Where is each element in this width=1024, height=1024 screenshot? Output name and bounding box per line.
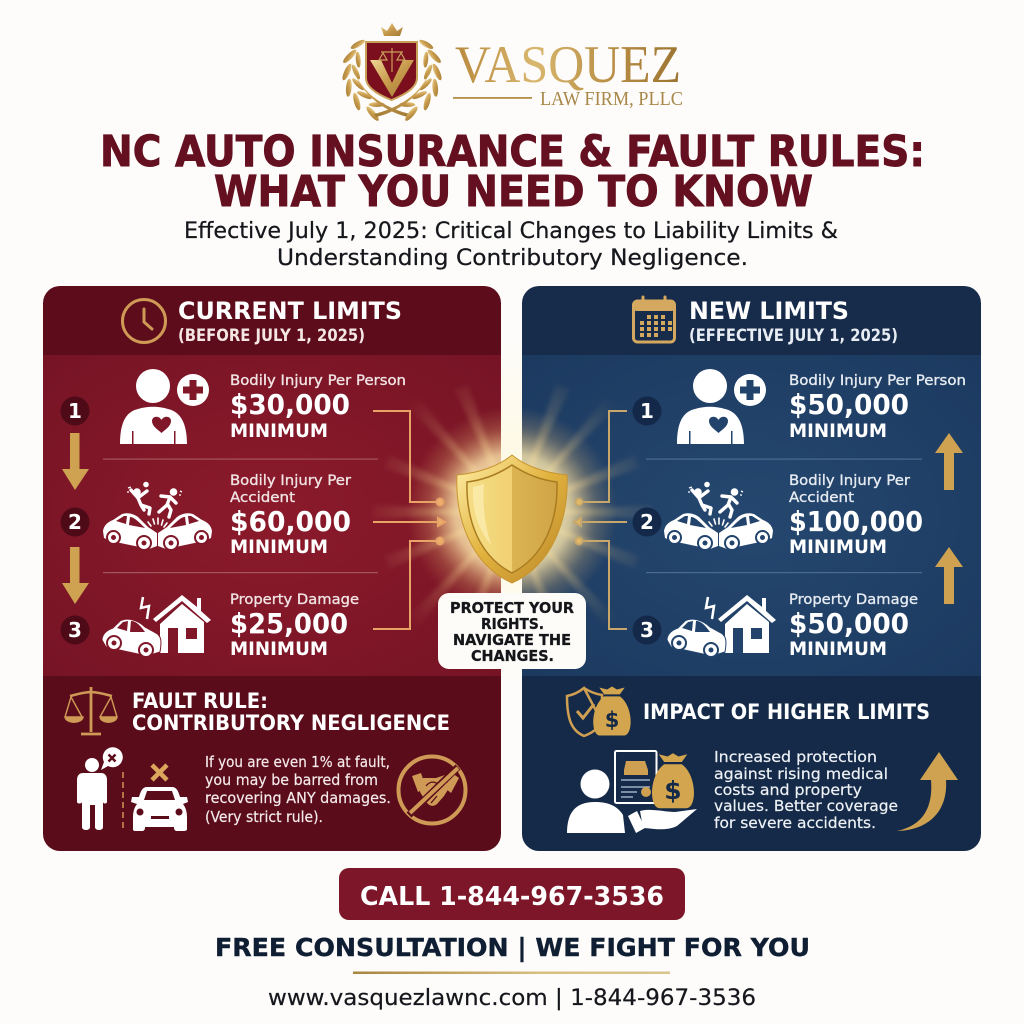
badge 2: 2 [640,510,654,534]
arrow: up 2 [935,547,963,604]
callout: protect your rights: RIGHTS. [481,615,544,633]
badge 1 [60,396,90,426]
title: NC AUTO INSURANCE & FAULT RULES: [100,127,925,177]
badge 3 [60,616,90,644]
wordmark: VASQUEZ [455,36,681,94]
icon: shield check with money bag [567,687,631,736]
row 3 text: $50,000 [789,607,909,640]
row 2 text: MINIMUM [230,536,328,558]
arrow: up 1 [935,433,963,490]
row 2 text: Bodily Injury Per [230,473,351,489]
impact text: against rising medical [714,765,888,783]
heading: impact: IMPACT OF HIGHER LIMITS [643,700,930,724]
row 2 text: $100,000 [789,505,923,538]
icon: golden shield [457,455,567,583]
callout: protect your rights [438,593,586,669]
badge 1: 1 [68,399,82,423]
center glow and rays [372,384,652,641]
icon: prohibited handshake [398,756,466,824]
footer: impact of higher limits [567,687,958,833]
subtitle: Understanding Contributory Negligence. [277,245,748,271]
subheading: effective date: (EFFECTIVE JULY 1, 2025) [689,326,898,345]
subheading: before date: (BEFORE JULY 1, 2025) [178,326,365,345]
title [100,127,925,217]
badge 3: 3 [68,618,82,642]
icon: crown [381,23,403,36]
icon: car front view [131,787,188,831]
badge 2 [60,508,90,536]
heading: current limits: CURRENT LIMITS [178,297,402,325]
call button [339,868,685,920]
row 1 text: Bodily Injury Per Person [789,373,966,389]
arrow: curved up [897,752,958,831]
impact text [714,748,898,832]
icon: person with medical cross [120,369,209,444]
row 2 text: MINIMUM [789,536,887,558]
row 2 text: $60,000 [230,505,351,538]
impact text: costs and property [714,781,862,799]
right panel header [634,297,898,345]
callout: protect your rights: NAVIGATE THE [453,631,571,649]
callout: protect your rights: PROTECT YOUR [450,599,574,617]
left column rows [60,369,406,660]
tagline: LAW FIRM, PLLC [540,88,683,110]
website and phone: www.vasquezlawnc.com | 1-844-967-3536 [268,986,756,1011]
icon: person, policy and money [567,751,697,833]
left connectors [373,411,445,629]
icon: car crash [103,482,212,550]
badge 3: 3 [640,618,654,642]
logo: Vasquez Law Firm [341,23,683,122]
fault rule text: you may be barred from [205,771,378,789]
icon: scales of justice [65,687,117,734]
row 3 text [230,592,359,660]
left panel header [122,297,402,345]
icon: car hitting house [667,595,776,657]
impact text: values. Better coverage [714,797,898,815]
row 2 text [230,473,351,558]
row 2 text: Accident [230,490,295,506]
icon: laurel wreath [341,38,443,122]
icon: car hitting house [102,595,211,657]
subtitle [184,218,838,271]
impact text: Increased protection [714,748,877,766]
badge 2: 2 [68,510,82,534]
badge 1 [632,396,662,426]
row 1 text: $50,000 [789,388,909,421]
panel: new limits [522,286,981,851]
icon: car crash [664,482,773,550]
row 1 text: $30,000 [230,388,350,421]
row 3 text: $25,000 [230,607,348,640]
badge 2 [632,508,662,536]
icon: clock [122,300,166,342]
subtitle: Effective July 1, 2025: Critical Changes to Liability Limits & [184,218,838,244]
icon: person with x speech bubble [77,747,123,830]
fault rule text: If you are even 1% at fault, [205,753,390,771]
row 1 text: Bodily Injury Per Person [230,373,406,389]
row 1 text [789,373,966,442]
row 3 text: Property Damage [230,592,359,608]
tagline: free consultation: FREE CONSULTATION | WE FIGHT FOR YOU [215,933,810,962]
icon: calendar [634,297,674,342]
icon: crest shield [366,42,417,100]
row 2 text [789,473,923,558]
panel: current limits [43,286,501,851]
row 3 text: Property Damage [789,592,918,608]
footer: fault rule [65,687,466,831]
arrow: down 2 [62,547,89,604]
row 3 text: MINIMUM [230,638,328,660]
badge 3 [632,616,662,644]
icon: shield check with money bag: $ [605,708,619,732]
row 2 text: Bodily Injury Per [789,473,910,489]
icon: person, policy and money: $ [664,776,682,805]
impact text: for severe accidents. [714,814,876,832]
row 2 text: Accident [789,490,854,506]
title: WHAT YOU NEED TO KNOW [214,167,813,217]
icon: person with medical cross [677,369,766,444]
arrow: down 1 [62,433,89,490]
heading: new limits: NEW LIMITS [689,297,849,325]
fault rule text: recovering ANY damages. [205,789,391,807]
row 1 text [230,373,406,442]
footer: fault rule: CONTRIBUTORY NEGLIGENCE [132,711,450,735]
heading: fault rule: FAULT RULE: [132,689,268,713]
icon: x mark [152,765,167,780]
badge 1: 1 [640,399,654,423]
tagline rule [453,97,532,99]
call button: CALL 1-844-967-3536 [360,882,664,912]
row 1 text: MINIMUM [230,420,328,442]
row 3 text [789,592,918,660]
right column rows [632,369,966,660]
row 1 text: MINIMUM [789,420,887,442]
callout: protect your rights: CHANGES. [471,647,554,665]
fault rule text: (Very strict rule). [205,808,323,826]
row 3 text: MINIMUM [789,638,887,660]
right connectors [574,411,627,629]
fault rule text [205,753,391,826]
